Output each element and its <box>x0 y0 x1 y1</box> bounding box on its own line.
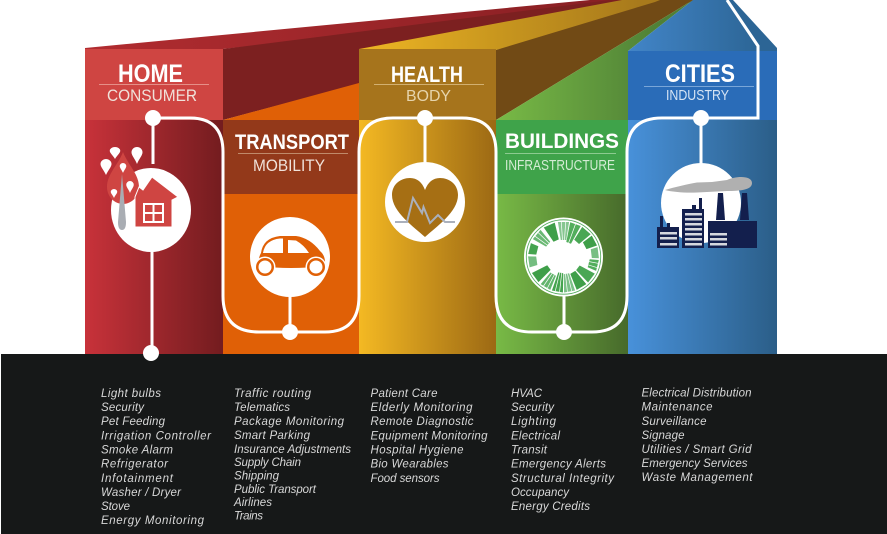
panel: buildings <box>496 0 693 354</box>
list: buildings: Electrical <box>511 430 560 442</box>
list: transport: Airlines <box>233 497 272 509</box>
heading: health: HEALTH <box>391 62 463 87</box>
heading: buildings: INFRASTRUCTURE <box>505 158 615 174</box>
list: home: Smoke Alarm <box>101 444 173 456</box>
base panel: black band <box>1 354 887 534</box>
list: cities: Electrical Distribution <box>642 388 752 400</box>
list: health: Remote Diagnostic <box>370 416 474 428</box>
connector line <box>143 0 758 361</box>
list: buildings: HVAC <box>511 388 543 400</box>
list: health: Food sensors <box>370 473 440 485</box>
panel: home <box>85 49 223 354</box>
list: cities: Signage <box>642 430 684 442</box>
heading: cities: CITIES <box>665 60 735 88</box>
heading: transport <box>235 131 349 175</box>
heading: buildings: BUILDINGS <box>505 130 619 153</box>
list: buildings: Lighting <box>511 416 557 428</box>
list: home <box>101 388 212 527</box>
list: health: Patient Care <box>370 388 438 400</box>
heading: buildings <box>505 130 619 174</box>
panel: cities <box>628 0 777 354</box>
panel: transport <box>223 120 359 354</box>
list: home: Energy Monitoring <box>101 515 205 527</box>
list: transport: Public Transport <box>234 484 317 496</box>
list: cities: Surveillance <box>642 416 706 428</box>
list: cities: Waste Management <box>642 472 753 484</box>
list: home: Pet Feeding <box>101 416 166 428</box>
icon: radial city plan <box>524 218 603 296</box>
list: health: Hospital Hygiene <box>370 444 464 456</box>
list: buildings: Security <box>511 402 555 414</box>
list: cities: Emergency Services <box>642 458 748 470</box>
list: buildings: Emergency Alerts <box>511 458 606 470</box>
list: home: Refrigerator <box>101 458 169 470</box>
list: buildings: Occupancy <box>511 487 570 499</box>
list: transport: Supply Chain <box>234 457 301 469</box>
list: transport: Telematics <box>234 402 290 414</box>
list: cities <box>642 388 753 484</box>
panel: receding roof faces <box>85 0 700 120</box>
list: home: Washer / Dryer <box>101 487 182 499</box>
list: home: Irrigation Controller <box>101 430 212 442</box>
list: buildings: Energy Credits <box>511 501 590 513</box>
list: buildings: Transit <box>511 444 548 456</box>
list: cities: Utilities / Smart Grid <box>642 444 752 456</box>
heading: home <box>99 60 209 105</box>
list: transport <box>233 388 351 522</box>
heading: transport: MOBILITY <box>253 156 325 175</box>
list: buildings <box>511 388 615 513</box>
icon: heart with pulse <box>385 162 465 242</box>
heading: health <box>374 62 484 105</box>
icon: car <box>250 217 330 297</box>
list: buildings: Structural Integrity <box>511 473 615 485</box>
list: transport: Insurance Adjustments <box>234 444 351 456</box>
panel: health <box>359 49 496 354</box>
list: home: Security <box>101 402 145 414</box>
heading: cities <box>644 60 754 104</box>
list: home: Infotainment <box>101 473 174 485</box>
list: home: Light bulbs <box>101 388 161 400</box>
list: transport: Trains <box>234 510 263 522</box>
list: health <box>370 388 488 485</box>
list: health: Bio Wearables <box>370 458 449 470</box>
list: transport: Smart Parking <box>234 430 311 442</box>
list: transport: Traffic routing <box>234 388 312 400</box>
icon: house with tree <box>100 147 191 252</box>
heading: health: BODY <box>406 88 451 105</box>
list: home: Stove <box>101 501 130 513</box>
list: transport: Package Monitoring <box>234 416 345 428</box>
list: health: Equipment Monitoring <box>370 430 488 442</box>
list: cities: Maintenance <box>642 402 712 414</box>
heading: home: CONSUMER <box>107 86 197 105</box>
heading: cities: INDUSTRY <box>666 87 729 104</box>
heading: transport: TRANSPORT <box>235 131 349 154</box>
icon: factory skyline <box>657 163 757 248</box>
list: transport: Shipping <box>234 470 280 482</box>
list: health: Elderly Monitoring <box>370 402 473 414</box>
heading: home: HOME <box>118 60 183 88</box>
